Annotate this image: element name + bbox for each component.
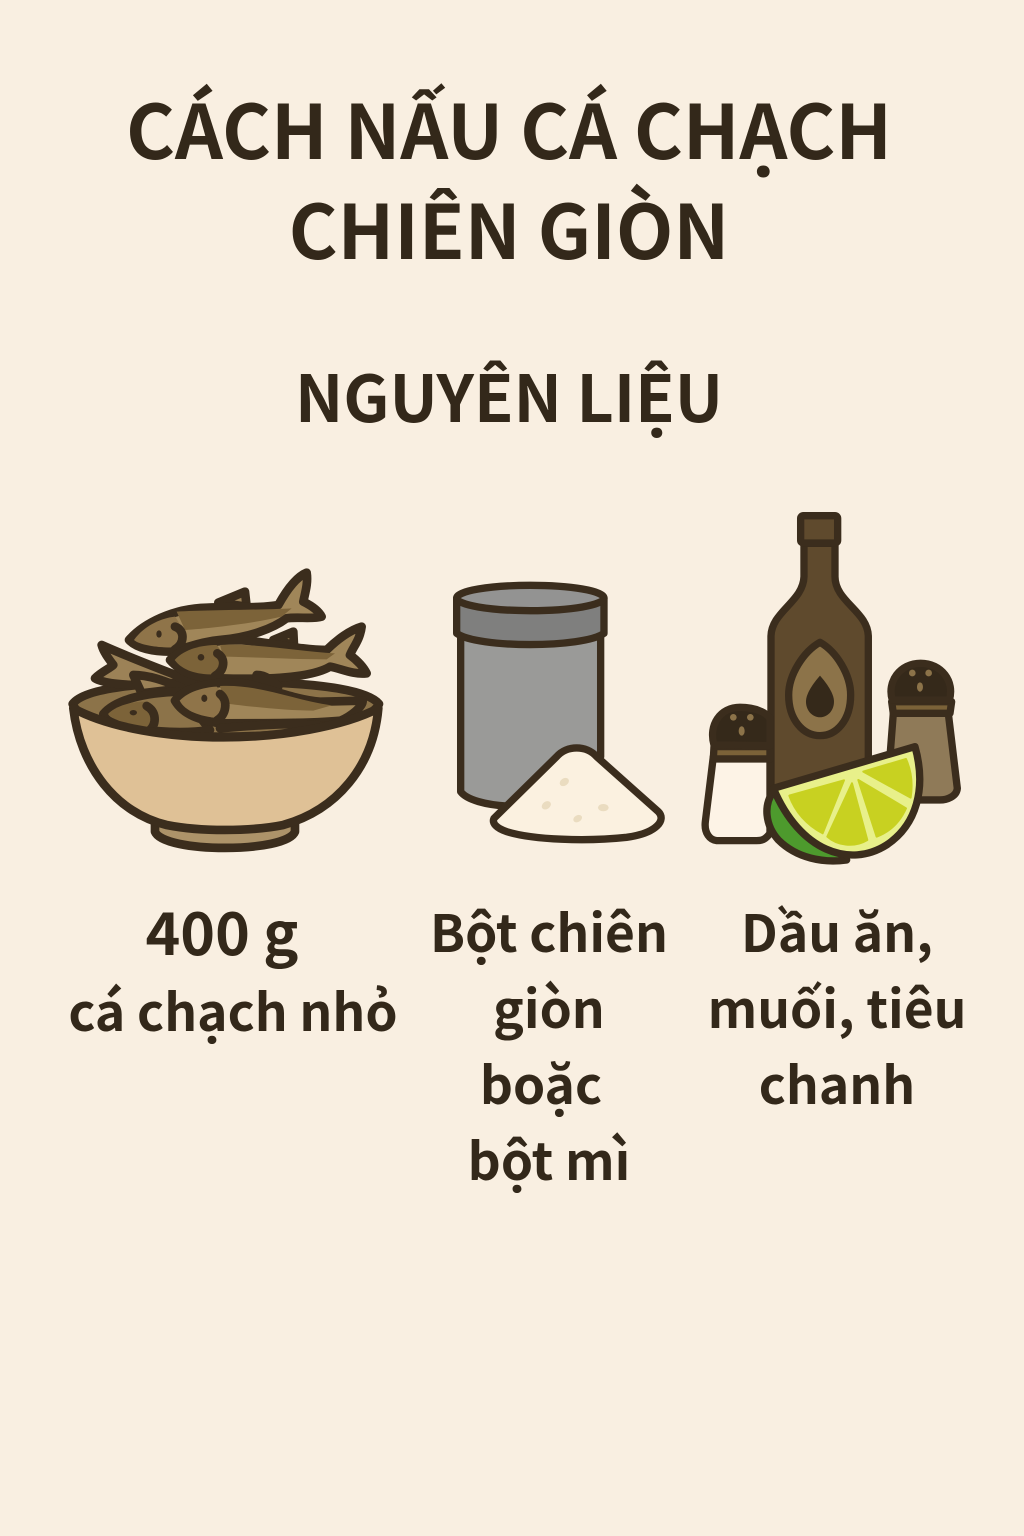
label: flour bbox=[430, 892, 668, 1195]
label: flour: giòn bbox=[493, 968, 605, 1043]
label: flour: boặc bbox=[480, 1044, 602, 1119]
title: CHIÊN GIÒN bbox=[289, 172, 729, 281]
icon: flour canister with powder bbox=[457, 585, 661, 840]
label: seasoning bbox=[708, 892, 966, 1119]
oil bottle bbox=[771, 516, 868, 792]
label: seasoning: Dầu ăn, bbox=[741, 892, 933, 967]
pepper shaker bbox=[887, 663, 957, 800]
label: fish: 400 g bbox=[145, 887, 299, 972]
powder pile bbox=[493, 748, 661, 840]
icon: oil bottle, salt and pepper shakers, lime wedge bbox=[705, 516, 957, 861]
label: flour: Bột chiên bbox=[430, 892, 668, 967]
title: CÁCH NẤU CÁ CHẠCH bbox=[126, 72, 892, 181]
icon: bowl of loach fish bbox=[73, 573, 379, 848]
title bbox=[126, 72, 892, 281]
section heading: ingredients: NGUYÊN LIỆU bbox=[295, 347, 723, 441]
label: flour: bột mì bbox=[468, 1120, 630, 1195]
label: fish bbox=[68, 887, 398, 1046]
lime wedge bbox=[767, 747, 920, 861]
label: seasoning: muối, tiêu bbox=[708, 968, 966, 1043]
salt shaker bbox=[705, 707, 770, 841]
label: fish: cá chạch nhỏ bbox=[68, 971, 398, 1046]
label: seasoning: chanh bbox=[759, 1044, 915, 1119]
